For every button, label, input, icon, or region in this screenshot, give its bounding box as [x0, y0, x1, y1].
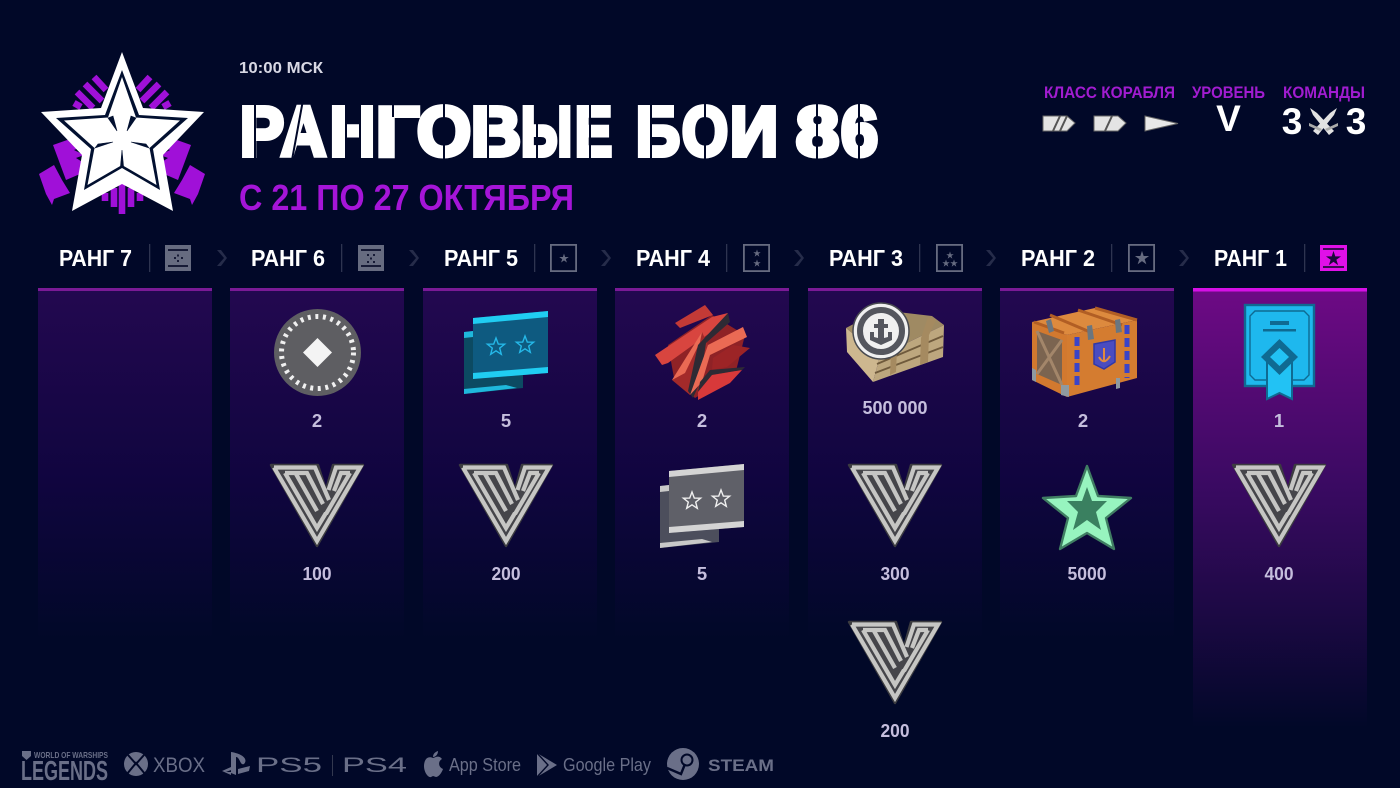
value: 2 — [312, 410, 322, 431]
logo: google play — [537, 753, 651, 777]
value extra: 200 — [880, 720, 910, 741]
divider — [332, 755, 333, 776]
emblem rays — [74, 77, 170, 214]
value: 5000 — [1068, 563, 1106, 584]
title: Р — [240, 92, 284, 170]
value: 400 — [1264, 563, 1294, 584]
time label: 10:00 МСК — [239, 60, 323, 77]
icon: chevron badge — [849, 465, 941, 546]
emblem star outer — [41, 52, 204, 211]
title: О — [417, 92, 471, 170]
teams block — [1282, 83, 1366, 142]
title: Б — [636, 92, 680, 170]
logo: app store: App Store — [449, 755, 521, 775]
value: 5 — [501, 410, 511, 431]
icon: destroyer class — [1043, 116, 1075, 131]
logo: ps5: PS5 — [256, 754, 322, 777]
icon: chevron badge — [1233, 465, 1325, 546]
header: rank 3: ★ — [946, 251, 954, 260]
header: rank 4: ★ — [753, 259, 761, 268]
panel: rank 6 — [230, 288, 404, 640]
panel: rank 3 — [808, 288, 982, 640]
ship class label: КЛАСС КОРАБЛЯ — [1044, 83, 1175, 102]
title: О — [682, 92, 728, 170]
panel: rank 1 — [1193, 288, 1367, 728]
icon: chevron badge extra — [849, 622, 941, 703]
icon: chevron badge — [460, 465, 552, 546]
icon: chevron badge — [271, 465, 363, 546]
emblem star inner — [64, 77, 180, 185]
header: rank 1: РАНГ 1 — [1214, 245, 1287, 271]
value: 5 — [697, 563, 707, 584]
tier label: УРОВЕНЬ — [1192, 83, 1265, 102]
teams label: КОМАНДЫ — [1283, 83, 1365, 102]
emblem star ring — [56, 70, 188, 190]
icon: certificate — [1245, 305, 1314, 399]
title: Н — [330, 92, 375, 170]
value: 500 000 — [862, 397, 928, 418]
header: rank 3: ★★ — [942, 259, 958, 268]
header: rank 7: РАНГ 7 — [59, 245, 132, 271]
header: rank 4: РАНГ 4 — [636, 245, 710, 271]
title: Е — [575, 92, 612, 170]
title: В — [471, 92, 521, 170]
subtitle: dates: С 21 ПО 27 ОКТЯБРЯ — [239, 177, 574, 218]
teams left value: 3 — [1282, 101, 1302, 142]
header: rank 5 — [444, 244, 576, 272]
value: 2 — [1078, 410, 1088, 431]
title: Ы — [521, 92, 572, 170]
header: rank 3 — [829, 244, 962, 272]
panel: rank 5 — [423, 288, 597, 640]
value: 100 — [302, 563, 332, 584]
title: Г — [376, 92, 419, 170]
emblem ribbons — [39, 139, 205, 205]
ship class block — [1043, 83, 1178, 131]
chevron — [1179, 250, 1189, 266]
title: 8 — [796, 92, 839, 170]
logo: app store — [424, 751, 521, 777]
title: 6 — [841, 92, 878, 170]
icon: grey flags — [660, 464, 744, 548]
tier value: V — [1216, 98, 1241, 139]
header: rank 6: РАНГ 6 — [251, 245, 325, 271]
chevron — [409, 250, 419, 266]
footer platform logos — [21, 748, 774, 786]
chevron — [601, 250, 611, 266]
chevron — [986, 250, 996, 266]
header: rank 2: ★ — [1134, 250, 1150, 267]
icon: green star — [1043, 466, 1131, 549]
icon: cruiser class — [1094, 116, 1126, 131]
value: 200 — [492, 563, 520, 584]
icon: crossed swords — [1309, 108, 1338, 135]
teams right value: 3 — [1346, 101, 1366, 142]
panel: rank 2 — [1000, 288, 1174, 640]
title: И — [730, 92, 778, 170]
logo: ps5 — [222, 752, 322, 777]
emblem star creases — [95, 116, 149, 166]
chevron — [794, 250, 804, 266]
logo: wows legends: WORLD OF WARSHIPS — [34, 750, 108, 760]
header: rank 4 — [636, 244, 769, 272]
value: 1 — [1274, 410, 1284, 431]
logo: xbox: XBOX — [153, 754, 205, 777]
emblem: star logo — [39, 52, 205, 214]
logo: xbox — [124, 752, 205, 777]
header: rank 5: ★ — [559, 254, 569, 265]
header: rank 2 — [1021, 244, 1154, 272]
chevron — [217, 250, 227, 266]
logo: google play: Google Play — [563, 755, 651, 775]
icon: orange chest — [1032, 308, 1137, 397]
icon: blue flags — [464, 311, 548, 394]
logo: steam: STEAM — [708, 756, 774, 775]
title: А — [281, 92, 326, 170]
icon: camouflage — [655, 305, 750, 400]
logo: wows legends — [21, 750, 108, 786]
icon: crate with token — [846, 303, 944, 382]
logo: steam — [667, 748, 774, 780]
title — [240, 92, 878, 170]
icon: battleship class — [1145, 116, 1178, 131]
logo: ps4: PS4 — [342, 754, 408, 777]
header: rank 6 — [251, 244, 384, 272]
logo: wows legends: LEGENDS — [21, 755, 108, 786]
header: rank 7 — [59, 244, 191, 272]
header: rank 1: ★ — [1325, 251, 1342, 268]
tier block — [1192, 83, 1265, 139]
header: rank 3: РАНГ 3 — [829, 245, 903, 271]
value: 2 — [697, 410, 707, 431]
panel: rank 4 — [615, 288, 789, 640]
icon: signal token — [274, 309, 361, 396]
panel: rank 7 — [38, 288, 212, 640]
header: rank 1 — [1214, 244, 1347, 272]
header: rank 4: ★ — [753, 249, 761, 258]
header: rank 5: РАНГ 5 — [444, 245, 518, 271]
value: 300 — [880, 563, 910, 584]
header: rank 2: РАНГ 2 — [1021, 245, 1095, 271]
rank headers — [59, 244, 1347, 272]
